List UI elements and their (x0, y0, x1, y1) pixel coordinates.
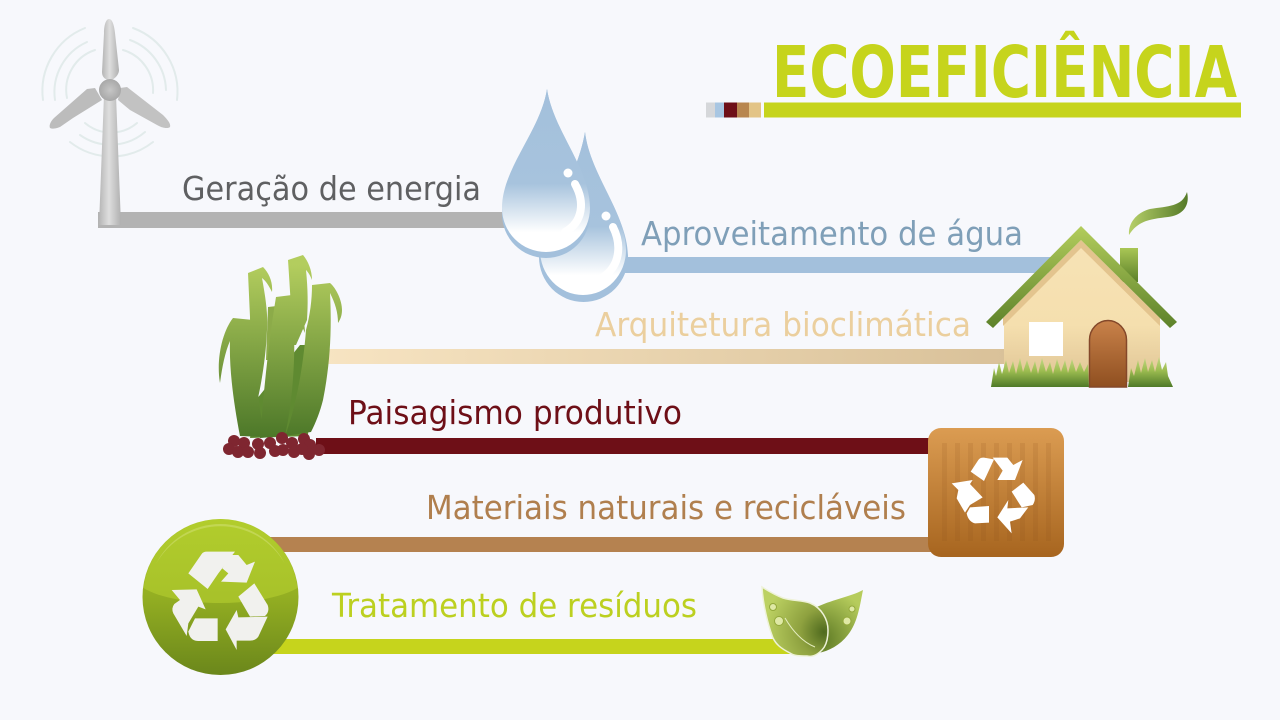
bar: tratamento de resíduos (272, 639, 792, 654)
title underline with colour swatches (706, 102, 1241, 118)
right leaf (285, 283, 342, 436)
walls (1004, 240, 1160, 382)
smoke (1129, 192, 1188, 235)
bar: aproveitamento de água (622, 257, 1052, 273)
bar: paisagismo produtivo (316, 438, 936, 454)
chimney (1120, 248, 1138, 282)
label: geração de energia: Geração de energia (182, 169, 481, 208)
icon: twin leaves (762, 587, 863, 656)
box stripes (942, 443, 1051, 541)
left leaf (219, 318, 265, 437)
window (1029, 322, 1063, 356)
dew drops (770, 604, 855, 626)
back leaf left (248, 267, 272, 398)
centre leaf (260, 295, 305, 438)
centre back sliver (266, 306, 277, 360)
icon: green recycling ball (142, 519, 298, 675)
label: materiais naturais e recicláveis: Materiais naturais e recicláveis (426, 488, 906, 527)
back leaf right (288, 255, 312, 345)
gloss (144, 519, 298, 603)
large drop (502, 89, 590, 258)
recycling symbol (952, 458, 1035, 533)
roof (986, 226, 1177, 328)
icon: water drops (502, 89, 628, 302)
recycling symbol (172, 552, 268, 650)
vein (785, 618, 815, 647)
soil berries (223, 432, 325, 460)
small drop (539, 132, 628, 302)
label: tratamento de resíduos: Tratamento de resíduos (331, 586, 697, 625)
bar: arquitetura bioclimática (322, 349, 1007, 364)
icon: house (986, 192, 1188, 387)
grass (991, 357, 1173, 387)
door (1090, 320, 1126, 387)
left leaf (762, 587, 828, 656)
label: arquitetura bioclimática: Arquitetura bioclimática (595, 305, 971, 344)
icon: wind turbine (42, 19, 177, 225)
bar: geração de energia (98, 212, 513, 228)
icon: brown recycling box (928, 428, 1064, 557)
eave band (1003, 240, 1160, 326)
icon: plant with soil (219, 255, 342, 460)
bar: materiais naturais (270, 537, 935, 552)
label: aproveitamento de água: Aproveitamento de água (641, 214, 1023, 253)
base filler between leaves (250, 345, 312, 438)
label: paisagismo produtivo: Paisagismo produtivo (348, 393, 682, 432)
right leaf (815, 590, 863, 653)
